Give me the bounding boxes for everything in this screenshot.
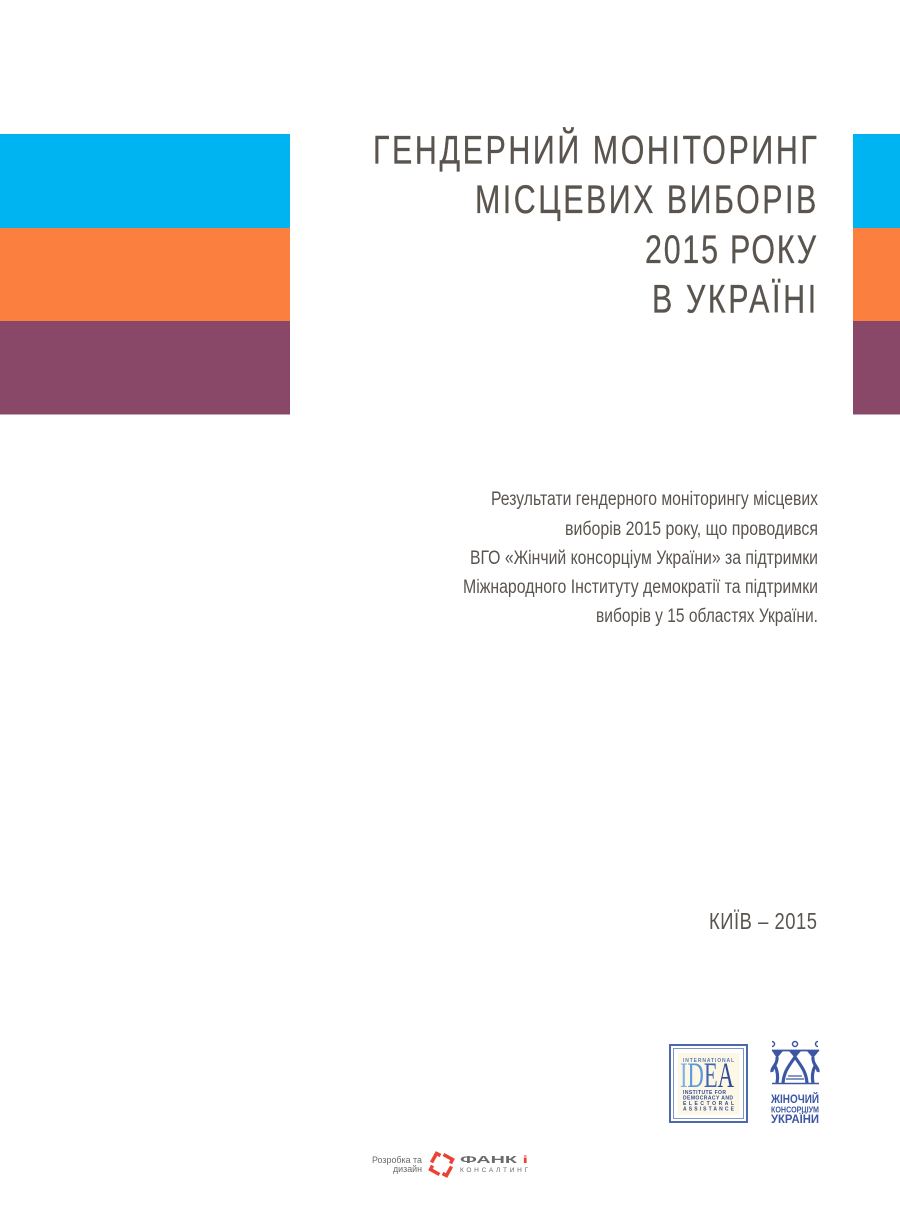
logo: International IDEA: ASSISTANCE bbox=[683, 1106, 735, 1112]
description text block: ВГО «Жінчий консорціум України» за підтримки bbox=[470, 548, 818, 569]
logo: International IDEA: INSTITUTE FOR bbox=[683, 1090, 726, 1096]
credit text: Розробка та bbox=[372, 1155, 422, 1165]
wordmark bbox=[460, 1155, 528, 1174]
logo: International IDEA bbox=[670, 1045, 747, 1122]
description text block: Результати гендерного моніторингу місцевих bbox=[491, 489, 818, 510]
title: МІСЦЕВИХ ВИБОРІВ bbox=[475, 177, 816, 222]
icon: Fanky Consulting star bbox=[430, 1154, 452, 1176]
logo: Women's Consortium of Ukraine: УКРАЇНИ bbox=[771, 1113, 819, 1126]
wordmark: ФАНК і bbox=[460, 1155, 528, 1166]
description text block: виборів 2015 року, що проводився bbox=[565, 519, 818, 540]
logo: International IDEA: INTERNATIONAL bbox=[683, 1058, 734, 1064]
credit text: дизайн bbox=[393, 1164, 422, 1174]
title: ГЕНДЕРНИЙ МОНІТОРИНГ bbox=[373, 127, 817, 173]
place and year: КИЇВ – 2015 bbox=[709, 909, 817, 935]
logo: International IDEA: DEMOCRACY AND bbox=[683, 1096, 733, 1102]
title: 2015 РОКУ bbox=[645, 227, 816, 272]
description text block: Міжнародного Інституту демократії та підтримки bbox=[463, 577, 818, 598]
credit text bbox=[372, 1155, 422, 1174]
description text block bbox=[463, 489, 818, 627]
wordmark: КОНСАЛТИНГ bbox=[460, 1167, 528, 1174]
left colour block bbox=[0, 134, 290, 414]
icon: three figures bbox=[772, 1042, 819, 1084]
logo: Women's Consortium of Ukraine bbox=[770, 1042, 819, 1126]
title bbox=[373, 127, 817, 322]
description text block: виборів у 15 областях України. bbox=[596, 606, 818, 627]
logo: Women's Consortium of Ukraine: ЖІНОЧИЙ bbox=[770, 1093, 819, 1106]
title: В УКРАЇНІ bbox=[652, 276, 816, 322]
developer credit bbox=[372, 1154, 528, 1176]
right colour block bbox=[853, 134, 900, 414]
logo: International IDEA: ELECTORAL bbox=[683, 1101, 734, 1107]
logo: International IDEA: IDEA bbox=[680, 1055, 734, 1095]
logo: Women's Consortium of Ukraine: КОНСОРЦІУМ bbox=[771, 1104, 819, 1114]
